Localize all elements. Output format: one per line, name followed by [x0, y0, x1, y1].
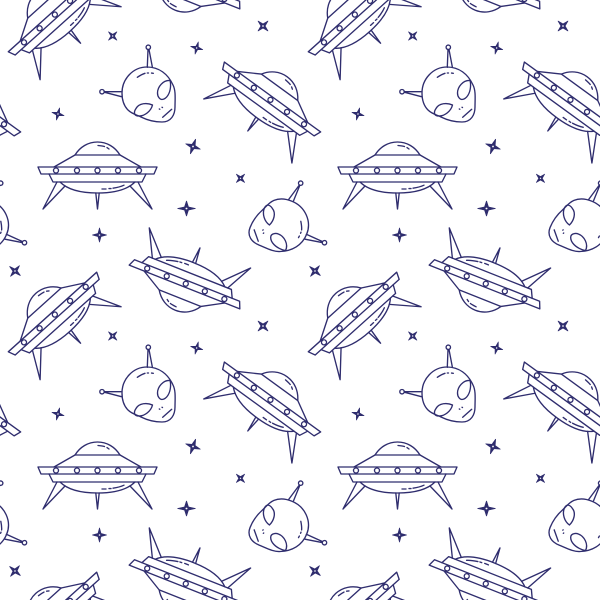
icon: UFO tilted left — [0, 0, 125, 83]
icon: alien head — [100, 345, 175, 422]
icon: UFO tilted right — [500, 42, 600, 166]
icon: UFO tilted right — [200, 342, 335, 466]
icon: alien head rotated — [545, 170, 600, 268]
icon: UFO tilted left — [292, 254, 425, 383]
icon: UFO upright — [38, 142, 157, 209]
icon: UFO tilted left — [292, 554, 425, 600]
icon: UFO tilted left — [292, 0, 425, 83]
icon: UFO upright — [38, 442, 157, 509]
aliens with antennae at right — [0, 170, 600, 568]
icon: alien head rotated — [245, 170, 345, 268]
UFOs tilted right — [0, 42, 600, 466]
aliens with antennae at top-left — [100, 45, 475, 422]
icon: UFO upside down — [420, 526, 555, 600]
icon: alien head rotated — [0, 470, 45, 568]
icon: UFO tilted right — [200, 42, 335, 166]
icon: UFO upside down — [120, 526, 255, 600]
icon: alien head — [100, 45, 175, 122]
icon: alien head rotated — [545, 470, 600, 568]
icon: UFO tilted right — [0, 342, 35, 466]
icon: UFO tilted right — [500, 342, 600, 466]
icon: UFO tilted right — [0, 42, 35, 166]
icon: UFO upright — [338, 442, 457, 509]
UFOs upside down — [120, 0, 555, 600]
icon: UFO upright — [338, 142, 457, 209]
UFOs tilted left — [0, 0, 425, 600]
icon: UFO upside down — [420, 0, 555, 32]
UFOs level — [38, 142, 457, 509]
icon: alien head — [400, 345, 475, 422]
icon: UFO upside down — [120, 226, 255, 332]
icon: UFO upside down — [120, 0, 255, 32]
icon: alien head rotated — [0, 170, 45, 268]
icon: alien head — [400, 45, 475, 122]
icon: UFO upside down — [420, 226, 555, 332]
icon: UFO tilted left — [0, 554, 125, 600]
icon: UFO tilted left — [0, 254, 125, 383]
icon: alien head rotated — [245, 470, 345, 568]
